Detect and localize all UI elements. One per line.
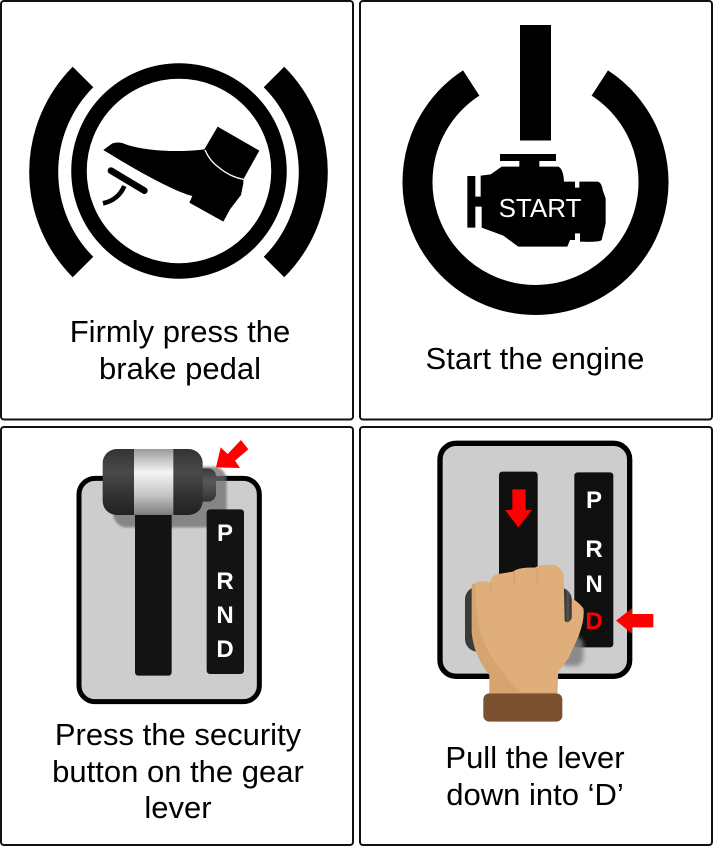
- caption: press the security button: Press the security: [55, 717, 302, 752]
- security button arrow: [216, 440, 248, 468]
- panel: press the brake pedal: [1, 1, 353, 420]
- red arrow pointing at D: [616, 608, 653, 634]
- red down arrow: [505, 489, 532, 527]
- panel: start the engine: [360, 1, 712, 420]
- caption: press the security button: lever: [144, 790, 212, 825]
- gear letters: [216, 520, 234, 663]
- panel: press the security button: [1, 427, 353, 845]
- gear letters: D: [216, 636, 234, 663]
- gear letters: N: [216, 602, 234, 629]
- caption: press the security button: button on the gear: [52, 754, 304, 789]
- gear letters: P: [217, 520, 233, 547]
- icon: brake warning symbol: [44, 71, 313, 271]
- gear letters: [585, 487, 603, 635]
- caption: firmly press the brake pedal: Firmly press the: [70, 314, 290, 349]
- caption: pull the lever: down into ‘D’: [446, 777, 624, 812]
- panel: pull the lever into D: [360, 427, 712, 845]
- hand gripping lever: [465, 565, 584, 722]
- gear letters: P: [586, 487, 602, 514]
- icon: gear selector plate: [440, 443, 653, 676]
- icon: power symbol with engine: [418, 25, 654, 300]
- caption: start the engine: Start the engine: [426, 341, 644, 376]
- caption: pull the lever: Pull the lever: [445, 740, 625, 775]
- gear letters: D: [585, 608, 603, 635]
- gear letters: R: [585, 536, 603, 563]
- icon: gear selector with button: [79, 440, 259, 702]
- engine label: START: [499, 193, 582, 223]
- gear letters: R: [216, 568, 234, 595]
- gear letters: N: [585, 571, 603, 598]
- caption: firmly press the brake pedal: brake pedal: [99, 351, 261, 386]
